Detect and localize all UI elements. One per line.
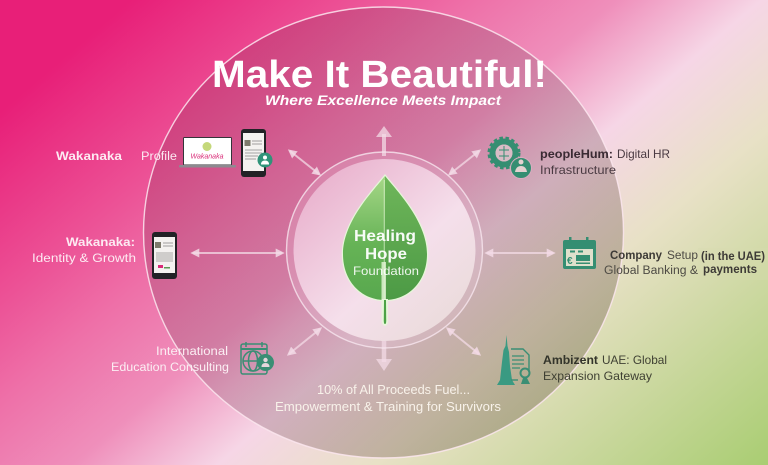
arrow: south west	[289, 329, 320, 354]
label: peopleHum: Infrastructure	[540, 163, 616, 177]
icon: finance calendar	[563, 237, 596, 269]
icon: globe calendar with person	[241, 342, 274, 374]
leaf label: Healing Hope Foundation: Hope	[365, 246, 407, 263]
label: company setup and banking: payments	[703, 264, 757, 276]
leaf label: Healing Hope Foundation: Foundation	[353, 264, 419, 278]
label: peopleHum: peopleHum:	[540, 147, 613, 161]
label: International Education Consulting: International	[156, 346, 228, 358]
arrow: north east	[450, 151, 479, 174]
label: proceeds statement: 10% of All Proceeds Fuel...	[317, 383, 470, 397]
icon: gear brain and head	[489, 138, 532, 178]
leaf label: Healing Hope Foundation	[353, 228, 419, 278]
label: proceeds statement: Empowerment & Training for Survivors	[275, 400, 501, 414]
label: Wakanaka Profile: Wakanaka	[56, 151, 123, 163]
arrow: south east	[448, 329, 479, 354]
label: company setup and banking: Setup	[667, 250, 698, 262]
label: Wakanaka Profile: Profile	[141, 151, 177, 163]
label: Wakanaka Identity & Growth: Wakanaka:	[66, 237, 135, 249]
large translucent circle	[144, 7, 624, 458]
label: company setup and banking	[604, 250, 765, 277]
label: company setup and banking: Global Banking &	[604, 265, 698, 277]
label: International Education Consulting	[111, 346, 229, 374]
arrow: right	[487, 252, 553, 254]
arrow: north west	[290, 151, 319, 174]
leaf label: Healing Hope Foundation: Healing	[354, 228, 416, 245]
icon: phone	[152, 232, 177, 279]
icon: laptop: Wakanaka	[191, 154, 224, 160]
label: Ambizent UAE: Expansion Gateway	[543, 369, 652, 383]
label: peopleHum: Digital HR	[617, 147, 670, 161]
subtitle: Where Excellence Meets Impact	[265, 92, 502, 108]
icon: phone with profile badge	[241, 129, 272, 177]
arrows radiating from the centre	[193, 126, 553, 371]
icon: laptop	[179, 137, 236, 168]
label: Ambizent UAE: UAE: Global	[602, 353, 667, 367]
title: Make It Beautiful!	[212, 54, 547, 96]
label: peopleHum	[540, 147, 670, 177]
icon: tower and certificate	[497, 335, 530, 385]
arrow: left	[193, 252, 282, 254]
arrow: down	[376, 341, 392, 371]
label: Ambizent UAE	[543, 353, 667, 383]
label: International Education Consulting: Education Consulting	[111, 362, 229, 374]
label: Ambizent UAE: Ambizent	[543, 353, 598, 367]
label: Wakanaka Identity & Growth: Identity & Growth	[32, 253, 136, 265]
label: proceeds statement	[275, 383, 501, 414]
label: Wakanaka Profile	[56, 151, 177, 163]
arrow: up	[376, 126, 392, 156]
centre circle	[286, 152, 482, 348]
label: company setup and banking: Company	[610, 250, 663, 262]
leaf	[343, 176, 427, 326]
label: company setup and banking: (in the UAE)	[701, 251, 765, 263]
icon: finance calendar: €	[567, 256, 573, 267]
label: Wakanaka Identity & Growth	[32, 237, 136, 265]
patch behind the UAE label	[698, 248, 768, 280]
